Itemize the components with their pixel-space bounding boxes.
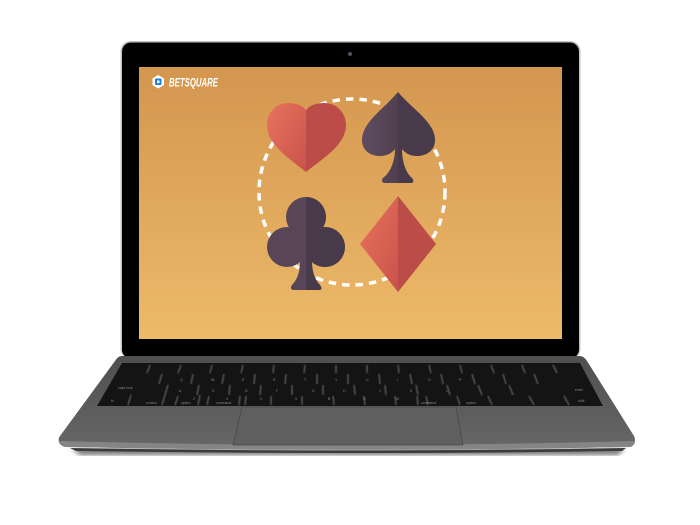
screen bbox=[139, 67, 562, 339]
key labels bbox=[111, 378, 584, 405]
laptop illustration bbox=[58, 41, 635, 456]
key labels: N bbox=[363, 397, 366, 401]
front lip bbox=[59, 441, 635, 450]
webcam bbox=[348, 52, 352, 56]
keyboard well bbox=[97, 363, 603, 406]
key labels: shift bbox=[578, 399, 584, 403]
key labels: Q bbox=[180, 378, 183, 382]
club suit bbox=[267, 197, 345, 290]
key labels: J bbox=[379, 389, 381, 393]
diamond suit bbox=[360, 196, 436, 292]
key labels: D bbox=[245, 389, 248, 393]
key labels: C bbox=[260, 397, 263, 401]
key labels: I bbox=[397, 378, 398, 382]
key labels: P bbox=[459, 378, 462, 382]
logo text: BETSQUARE bbox=[169, 76, 219, 90]
key labels: option bbox=[466, 401, 476, 405]
logo icon bbox=[152, 75, 164, 88]
key labels: X bbox=[226, 397, 229, 401]
key labels: M bbox=[396, 397, 399, 401]
heart suit bbox=[267, 103, 346, 172]
key labels: E bbox=[242, 378, 245, 382]
key labels: R bbox=[273, 378, 276, 382]
key separators bbox=[128, 365, 569, 405]
dashed circle bbox=[259, 99, 445, 285]
key labels: command bbox=[216, 401, 231, 405]
key labels: S bbox=[212, 389, 215, 393]
key labels: W bbox=[211, 378, 215, 382]
key labels: K bbox=[410, 389, 413, 393]
key labels: G bbox=[312, 389, 315, 393]
key labels: T bbox=[304, 378, 307, 382]
key labels: enter bbox=[575, 388, 584, 392]
key labels: O bbox=[428, 378, 431, 382]
key labels: B bbox=[328, 397, 331, 401]
laptop base bbox=[59, 356, 635, 455]
key labels: H bbox=[343, 389, 346, 393]
key labels: command bbox=[421, 401, 436, 405]
key labels: A bbox=[179, 389, 182, 393]
deck bbox=[59, 356, 635, 450]
key labels: V bbox=[295, 397, 298, 401]
laptop lid bbox=[120, 41, 580, 359]
shadow bbox=[72, 449, 625, 455]
key labels: U bbox=[366, 378, 369, 382]
key labels: option bbox=[181, 401, 191, 405]
logo bbox=[152, 75, 219, 90]
key labels: fn bbox=[111, 399, 114, 403]
key labels: caps lock bbox=[118, 386, 133, 390]
trackpad bbox=[233, 407, 463, 445]
spade suit bbox=[362, 92, 435, 183]
key labels: Z bbox=[193, 397, 196, 401]
key labels: control bbox=[146, 401, 157, 405]
key labels: F bbox=[276, 389, 278, 393]
key labels: L bbox=[446, 389, 448, 393]
key labels: Y bbox=[335, 378, 338, 382]
